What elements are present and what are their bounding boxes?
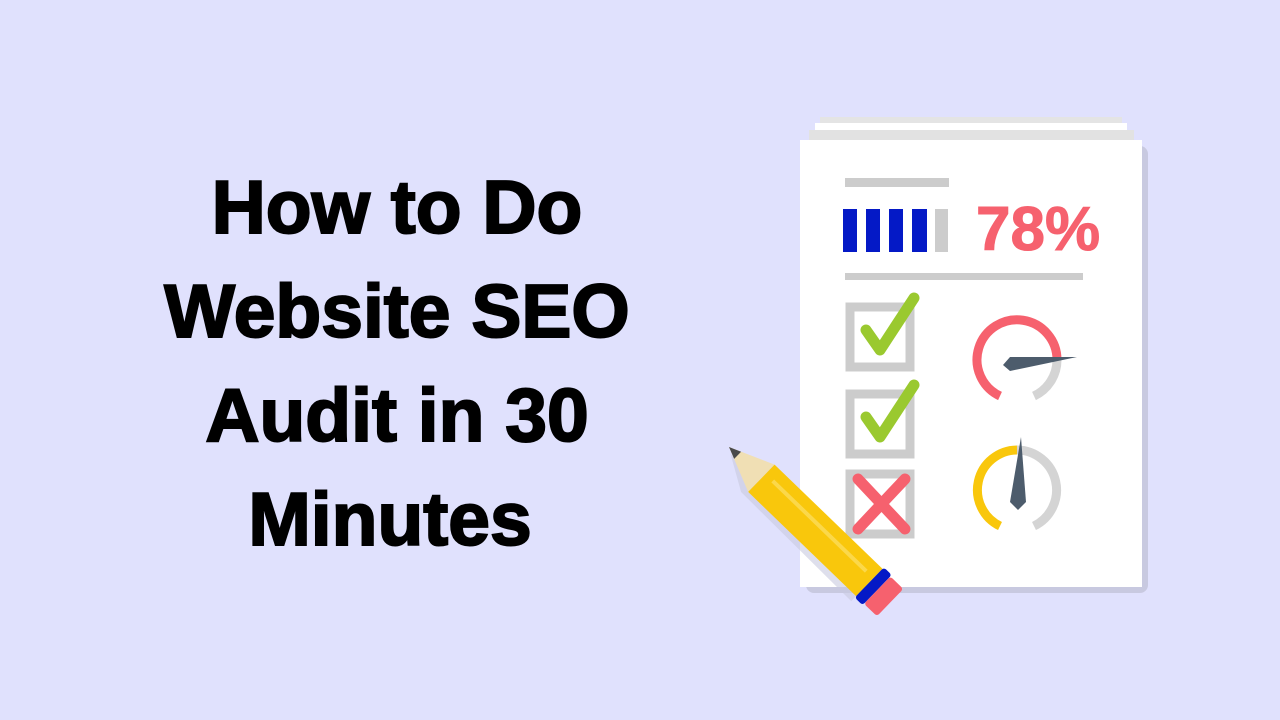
checkbox 3 crossed (850, 474, 910, 534)
title: Minutes (248, 477, 532, 561)
gauge 1 (977, 320, 1077, 396)
top gray line (845, 178, 949, 187)
pencil (711, 432, 905, 621)
pencil shadow (715, 454, 866, 601)
paper shadow (806, 146, 1148, 593)
illustration: audit report (711, 117, 1148, 621)
title: How to Do (212, 165, 582, 249)
title (164, 165, 630, 561)
stacked sheets (809, 117, 1134, 142)
percentage: 78% (976, 195, 1100, 264)
gauge 2 (977, 437, 1057, 526)
checkbox 2 checked (850, 385, 914, 454)
checkbox 1 checked (850, 298, 914, 367)
paper (800, 140, 1142, 587)
divider (845, 273, 1083, 280)
title: Website SEO (164, 269, 630, 353)
progress bars (843, 209, 948, 252)
title: Audit in 30 (205, 373, 589, 457)
